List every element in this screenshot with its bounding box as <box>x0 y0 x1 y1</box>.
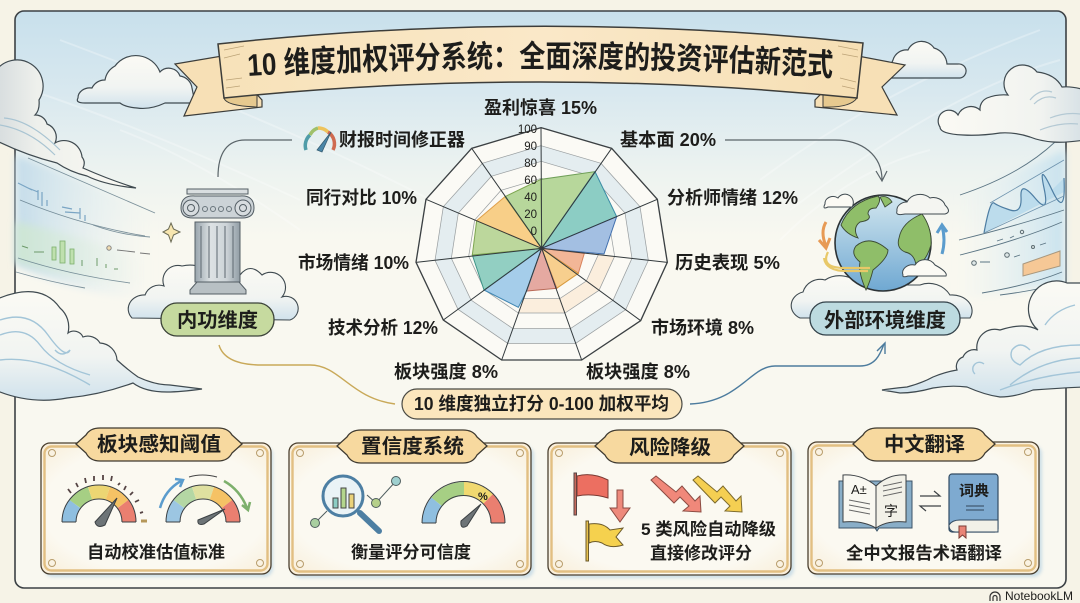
label: fundamentals: 基本面 20% <box>620 130 716 150</box>
label: market environment: 市场环境 8% <box>651 317 754 338</box>
heading plaque: 中文翻译 <box>884 432 965 456</box>
label: inner dimension pill <box>161 303 274 336</box>
heading plaque <box>76 428 242 461</box>
arrow: upper left connector <box>218 140 292 177</box>
label: sector strength right: 板块强度 8% <box>586 362 690 382</box>
chart: radar: 90 <box>524 141 537 153</box>
wind streaks left with faded charts <box>16 155 155 300</box>
icon: swap arrows <box>920 491 941 511</box>
label: historical performance: 历史表现 5% <box>675 253 780 273</box>
chart: radar: 100 <box>518 124 537 136</box>
cloud: upper right small <box>885 41 966 78</box>
icon: gauge two <box>160 475 250 524</box>
heading plaque: 板块感知阈值 <box>97 433 221 456</box>
chart: radar: 80 <box>524 158 537 170</box>
arrow: upper right connector <box>725 140 887 181</box>
icon: confidence gauge: % <box>478 491 488 503</box>
chart: radar <box>416 124 667 360</box>
text: 自动校准估值标准 <box>87 542 225 562</box>
icon: column on cloud, inner dimension <box>128 189 298 320</box>
arrow: blue connector <box>690 343 885 404</box>
label: sector strength left: 板块强度 8% <box>394 362 498 382</box>
icon: small gauge <box>305 128 334 152</box>
icon: falling arrows <box>651 476 742 512</box>
banner: title ribbon <box>174 26 906 117</box>
label: inner dimension pill: 内功维度 <box>177 309 258 332</box>
label: technical analysis: 技术分析 12% <box>328 318 438 338</box>
chart: radar: 60 <box>524 175 537 187</box>
icon: confidence gauge <box>422 482 505 527</box>
icon: open book: A± <box>851 482 867 497</box>
text: 5 类风险自动降级 <box>641 519 776 539</box>
icon: open book <box>839 475 912 531</box>
icon: dictionary: 词典 <box>959 482 990 500</box>
callout: scoring method: 10 维度独立打分 0-100 加权平均 <box>414 393 669 414</box>
icon: globe on cloud, external dimension <box>791 194 972 318</box>
wind streaks right with faded chart <box>955 142 1065 300</box>
watermark: NotebookLM: NotebookLM <box>1005 589 1073 603</box>
label: peer comparison: 同行对比 10% <box>306 188 417 208</box>
label: earnings timing corrector: 财报时间修正器 <box>339 130 465 150</box>
label: external dimension pill: 外部环境维度 <box>824 308 946 332</box>
icon: magnifier with chart and nodes <box>310 476 400 531</box>
icon: flags downgrade <box>574 473 630 561</box>
icon: open book: 字 <box>884 503 898 519</box>
label: external dimension pill <box>810 302 960 335</box>
label: earnings surprise: 盈利惊喜 15% <box>484 98 597 118</box>
chart: radar: 0 <box>531 226 537 238</box>
icon: gauge one <box>62 475 147 526</box>
panel: risk downgrade <box>548 430 794 578</box>
title: 10 维度加权评分系统：全面深度的投资评估新范式 <box>248 40 832 78</box>
cloud: left bottom <box>0 292 202 400</box>
panel: chinese translation <box>808 428 1042 577</box>
heading plaque <box>853 428 995 461</box>
heading plaque: 置信度系统 <box>361 434 464 458</box>
text: 全中文报告术语翻译 <box>846 543 1002 563</box>
chart: radar: 40 <box>524 192 537 204</box>
label: analyst sentiment: 分析师情绪 12% <box>667 188 798 208</box>
arrow: gold connector <box>219 345 395 404</box>
panel: sector thresholds <box>41 428 273 577</box>
icon: dictionary <box>949 474 998 538</box>
chart: radar: 20 <box>524 209 537 221</box>
cloud: left top <box>0 60 136 188</box>
heading plaque <box>595 430 744 463</box>
cloud: right bottom <box>882 281 1080 397</box>
heading plaque: 风险降级 <box>629 435 711 459</box>
cloud: right top <box>938 65 1080 142</box>
text: 衡量评分可信度 <box>351 543 471 562</box>
label: market sentiment: 市场情绪 10% <box>298 252 409 273</box>
callout: scoring method <box>402 389 682 419</box>
text: 直接修改评分 <box>650 543 752 563</box>
cloud: upper left small <box>77 56 195 108</box>
heading plaque <box>337 430 487 463</box>
panel: confidence system <box>289 430 534 578</box>
